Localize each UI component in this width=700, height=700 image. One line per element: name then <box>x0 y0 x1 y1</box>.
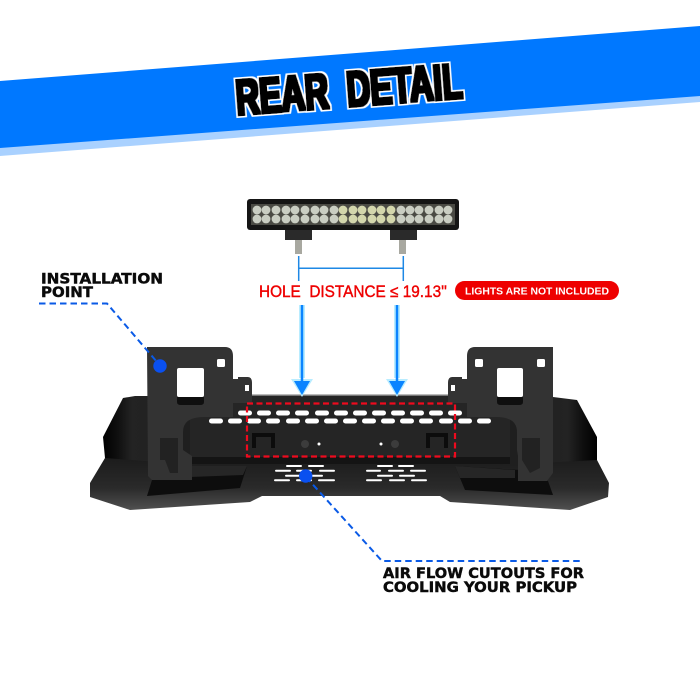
arrow: right mount <box>386 305 408 397</box>
label: installation point: INSTALLATION <box>41 272 163 288</box>
left recess <box>147 466 247 496</box>
left bracket <box>147 347 252 480</box>
air flow cutouts <box>275 466 426 480</box>
mounting brackets and bolts <box>285 230 417 254</box>
leader: air flow <box>306 477 580 561</box>
left wing <box>103 396 200 465</box>
label: air flow cutouts <box>383 566 584 596</box>
callout: lights not included <box>455 281 619 300</box>
base plate <box>90 455 609 510</box>
label: air flow cutouts: AIR FLOW CUTOUTS FOR <box>383 566 584 582</box>
icon: LED light bar <box>247 199 459 254</box>
label: installation point <box>41 272 163 301</box>
marker: installation point <box>153 359 167 373</box>
upper slots <box>238 410 462 416</box>
center panel <box>190 394 510 461</box>
LED lamps <box>253 206 452 223</box>
right wing <box>500 396 597 465</box>
banner <box>0 26 700 156</box>
hole distance label: HOLE DISTANCE ≤ 19.13'' <box>259 283 447 301</box>
arrow: left mount <box>291 305 313 397</box>
callout: lights not included: LIGHTS ARE NOT INCLUDED <box>465 286 609 298</box>
panel holes <box>301 440 399 448</box>
marker: air flow <box>299 469 312 483</box>
title: REAR DETAIL <box>234 53 464 126</box>
right bracket <box>448 347 553 481</box>
bumper <box>90 347 609 510</box>
red dashed highlight <box>247 404 455 456</box>
latches <box>252 433 448 448</box>
label: air flow cutouts: COOLING YOUR PICKUP <box>383 580 577 596</box>
right recess <box>455 466 553 495</box>
leader: installation point <box>39 304 157 362</box>
dark band under panel <box>190 457 510 464</box>
lower slots <box>209 418 491 424</box>
label: installation point: POINT <box>41 285 93 301</box>
dimension bracket <box>299 256 403 281</box>
